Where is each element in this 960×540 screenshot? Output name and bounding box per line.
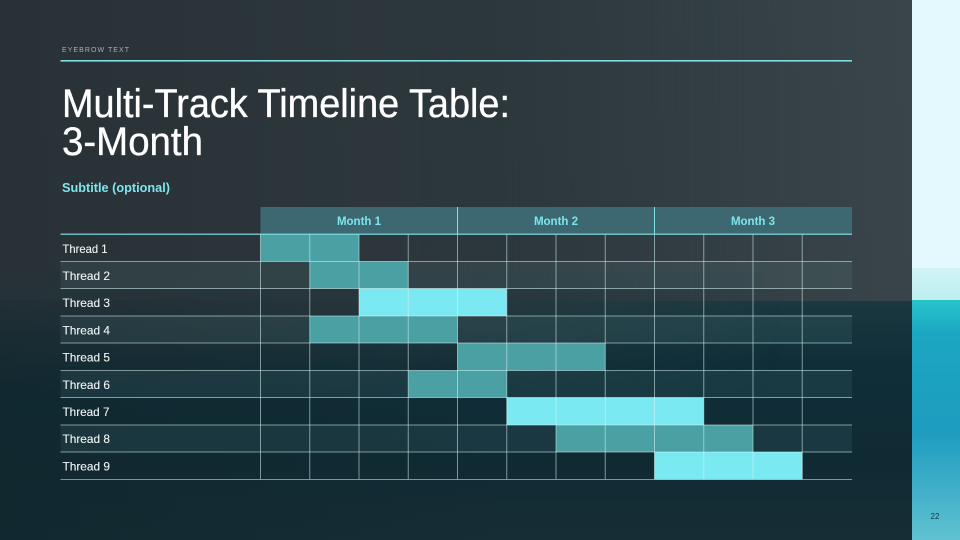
thread labels: Thread 3 [62,296,110,310]
alternating row stripes [60,262,852,452]
header rule [60,234,852,235]
thread labels [62,242,110,474]
title: Multi-Track Timeline Table: [62,82,510,126]
title: 3-Month [62,120,203,164]
thread labels: Thread 9 [62,460,110,474]
eyebrow rule [60,60,852,62]
page number: 22 [931,512,940,521]
month header band: Month 1 [337,216,382,228]
month header band [260,207,852,234]
title [62,82,510,164]
grid lines [60,234,852,480]
month header band: Month 3 [731,216,775,228]
schedule bars [260,234,802,480]
thread labels: Thread 7 [62,405,110,419]
thread labels: Thread 8 [62,432,110,446]
thread labels: Thread 4 [62,324,110,338]
subtitle: Subtitle (optional) [62,180,170,195]
thread labels: Thread 1 [62,242,108,256]
eyebrow text: EYEBROW TEXT [62,47,130,54]
timeline table [60,207,852,480]
thread labels: Thread 5 [62,350,110,364]
side panel [912,0,960,540]
month header band: Month 2 [534,216,578,228]
thread labels: Thread 2 [62,269,110,283]
thread labels: Thread 6 [62,378,110,392]
